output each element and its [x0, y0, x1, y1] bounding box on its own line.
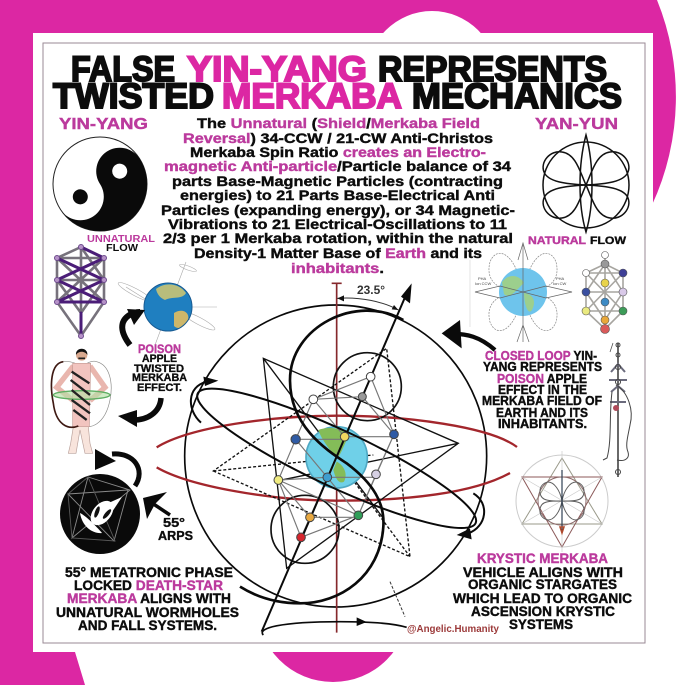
title [53, 50, 622, 116]
text block: krystic merkaba [453, 551, 632, 632]
label: 55 arps: ARPS [158, 528, 193, 543]
text block: metatronic phase: LOCKED DEATH-STAR [74, 578, 223, 593]
text block: closed loop: YANG REPRESENTS [483, 360, 602, 374]
chart: earth with field lobes: PHA [478, 276, 487, 281]
icon: yan-yun flower [543, 135, 629, 232]
text block: closed loop: POISON APPLE [497, 372, 587, 386]
text: poison apple twisted merkaba effect: POISON [138, 342, 181, 356]
text block: metatronic phase: AND FALL SYSTEMS. [78, 618, 217, 633]
arrow: curved earth to apple text [122, 309, 145, 345]
label: natural flow [528, 235, 627, 247]
text block: krystic merkaba: ASCENSION KRYSTIC [471, 604, 615, 619]
chart: earth with field lobes: PHA [556, 276, 565, 281]
text block: closed loop: INHABITANTS. [498, 417, 587, 431]
icon: krystic merkaba star [516, 451, 608, 552]
text: poison apple twisted merkaba effect: TWISTED [134, 363, 184, 375]
text block: central explanation: Particles (expanding energy), or 34 Magnetic- [161, 202, 515, 218]
icon: human figure with chakra column [603, 343, 631, 477]
text block: central explanation: Density-1 Matter Base of Earth and its [194, 245, 482, 261]
text block: krystic merkaba: VEHICLE ALIGNS WITH [463, 565, 623, 580]
title: MERKABA [222, 77, 402, 116]
label: natural flow: FLOW [590, 235, 627, 247]
label: unnatural flow: UNNATURAL [87, 233, 156, 245]
text block: central explanation: 2/3 per 1 Merkaba rotation, within the natural [163, 230, 513, 246]
title: MECHANICS [412, 77, 622, 116]
text block: closed loop: EFFECT IN THE [498, 383, 587, 397]
icon: yin-yang symbol [35, 119, 165, 249]
text block: krystic merkaba: ORGANIC STARGATES [468, 577, 617, 592]
text block: central explanation: The Unnatural (Shield /Merkaba Field [197, 115, 480, 131]
heading: yan-yun: YAN-YUN [535, 116, 618, 133]
text block: metatronic phase: 55° METATRONIC PHASE [65, 565, 233, 580]
text block: central explanation: magnetic Anti-particle /Particle balance of 34 [164, 158, 511, 174]
icon: distorted tree of life [54, 244, 106, 338]
arrow: 55 degree pointer [143, 492, 170, 519]
credit: angelic humanity: @Angelic.Humanity [407, 624, 499, 635]
text block: central explanation: parts Base-Magnetic Particles (contracting [172, 173, 503, 189]
text block: krystic merkaba: SYSTEMS [509, 617, 573, 632]
label: 55 arps: 55° [163, 515, 185, 530]
title: FALSE [71, 50, 175, 89]
text block: metatronic phase: UNNATURAL WORMHOLES [56, 605, 239, 620]
text block: krystic merkaba: KRYSTIC MERKABA [477, 551, 608, 566]
chart: earth with field lobes [470, 243, 572, 342]
icon: human figure with twisted merkaba [51, 349, 111, 453]
text block: central explanation: Reversal ) 34-CCW / 21-CW Anti-Christos [183, 130, 493, 146]
text block: central explanation: Vibrations to 21 Electrical-Oscillations to 11 [168, 216, 507, 232]
title: REPRESENTS [378, 50, 607, 89]
text block: closed loop: MERKABA FIELD OF [482, 394, 602, 408]
text block: closed loop [482, 349, 602, 431]
text block: metatronic phase: MERKABA ALIGNS WITH [67, 591, 231, 606]
title: YIN-YANG [187, 50, 367, 89]
icon: death-star merkaba [60, 474, 140, 554]
arrow: curved from text to figure [118, 398, 161, 427]
text block: central explanation: energies) to 21 Parts Base-Electrical Anti [180, 187, 495, 203]
text block: central explanation: Merkaba Spin Ratio creates an Electro- [190, 144, 486, 160]
label: 55 arps [158, 515, 193, 543]
text block: krystic merkaba: WHICH LEAD TO ORGANIC [453, 591, 632, 606]
heading: yin-yang: YIN-YANG [59, 116, 148, 133]
text block: central explanation: inhabitants . [291, 260, 384, 276]
title: TWISTED [53, 77, 214, 116]
arrow: curved up from death star [95, 449, 139, 486]
text: poison apple twisted merkaba effect: MERKABA [132, 372, 187, 384]
text: poison apple twisted merkaba effect: EFFECT. [137, 382, 182, 394]
text block: closed loop: CLOSED LOOP YIN- [485, 349, 597, 363]
icon: tree of life with coloured nodes [582, 252, 627, 334]
chart: earth with field lobes: Ion CW [553, 281, 567, 286]
label: unnatural flow: FLOW [106, 242, 138, 254]
label: natural flow: NATURAL [528, 235, 586, 247]
text: poison apple twisted merkaba effect: APPLE [142, 353, 177, 365]
label: 23.5 degrees: 23.5° [357, 285, 385, 297]
chart: earth with field lobes: Ion CCW [475, 281, 491, 286]
label: unnatural flow [87, 233, 156, 254]
text: poison apple twisted merkaba effect [132, 342, 187, 394]
text block: closed loop: EARTH AND ITS [496, 406, 588, 420]
icon: tilted earth left [117, 262, 217, 345]
chart: central merkaba diagram [157, 283, 517, 635]
text block: central explanation [161, 115, 515, 276]
text block: metatronic phase [56, 565, 239, 633]
